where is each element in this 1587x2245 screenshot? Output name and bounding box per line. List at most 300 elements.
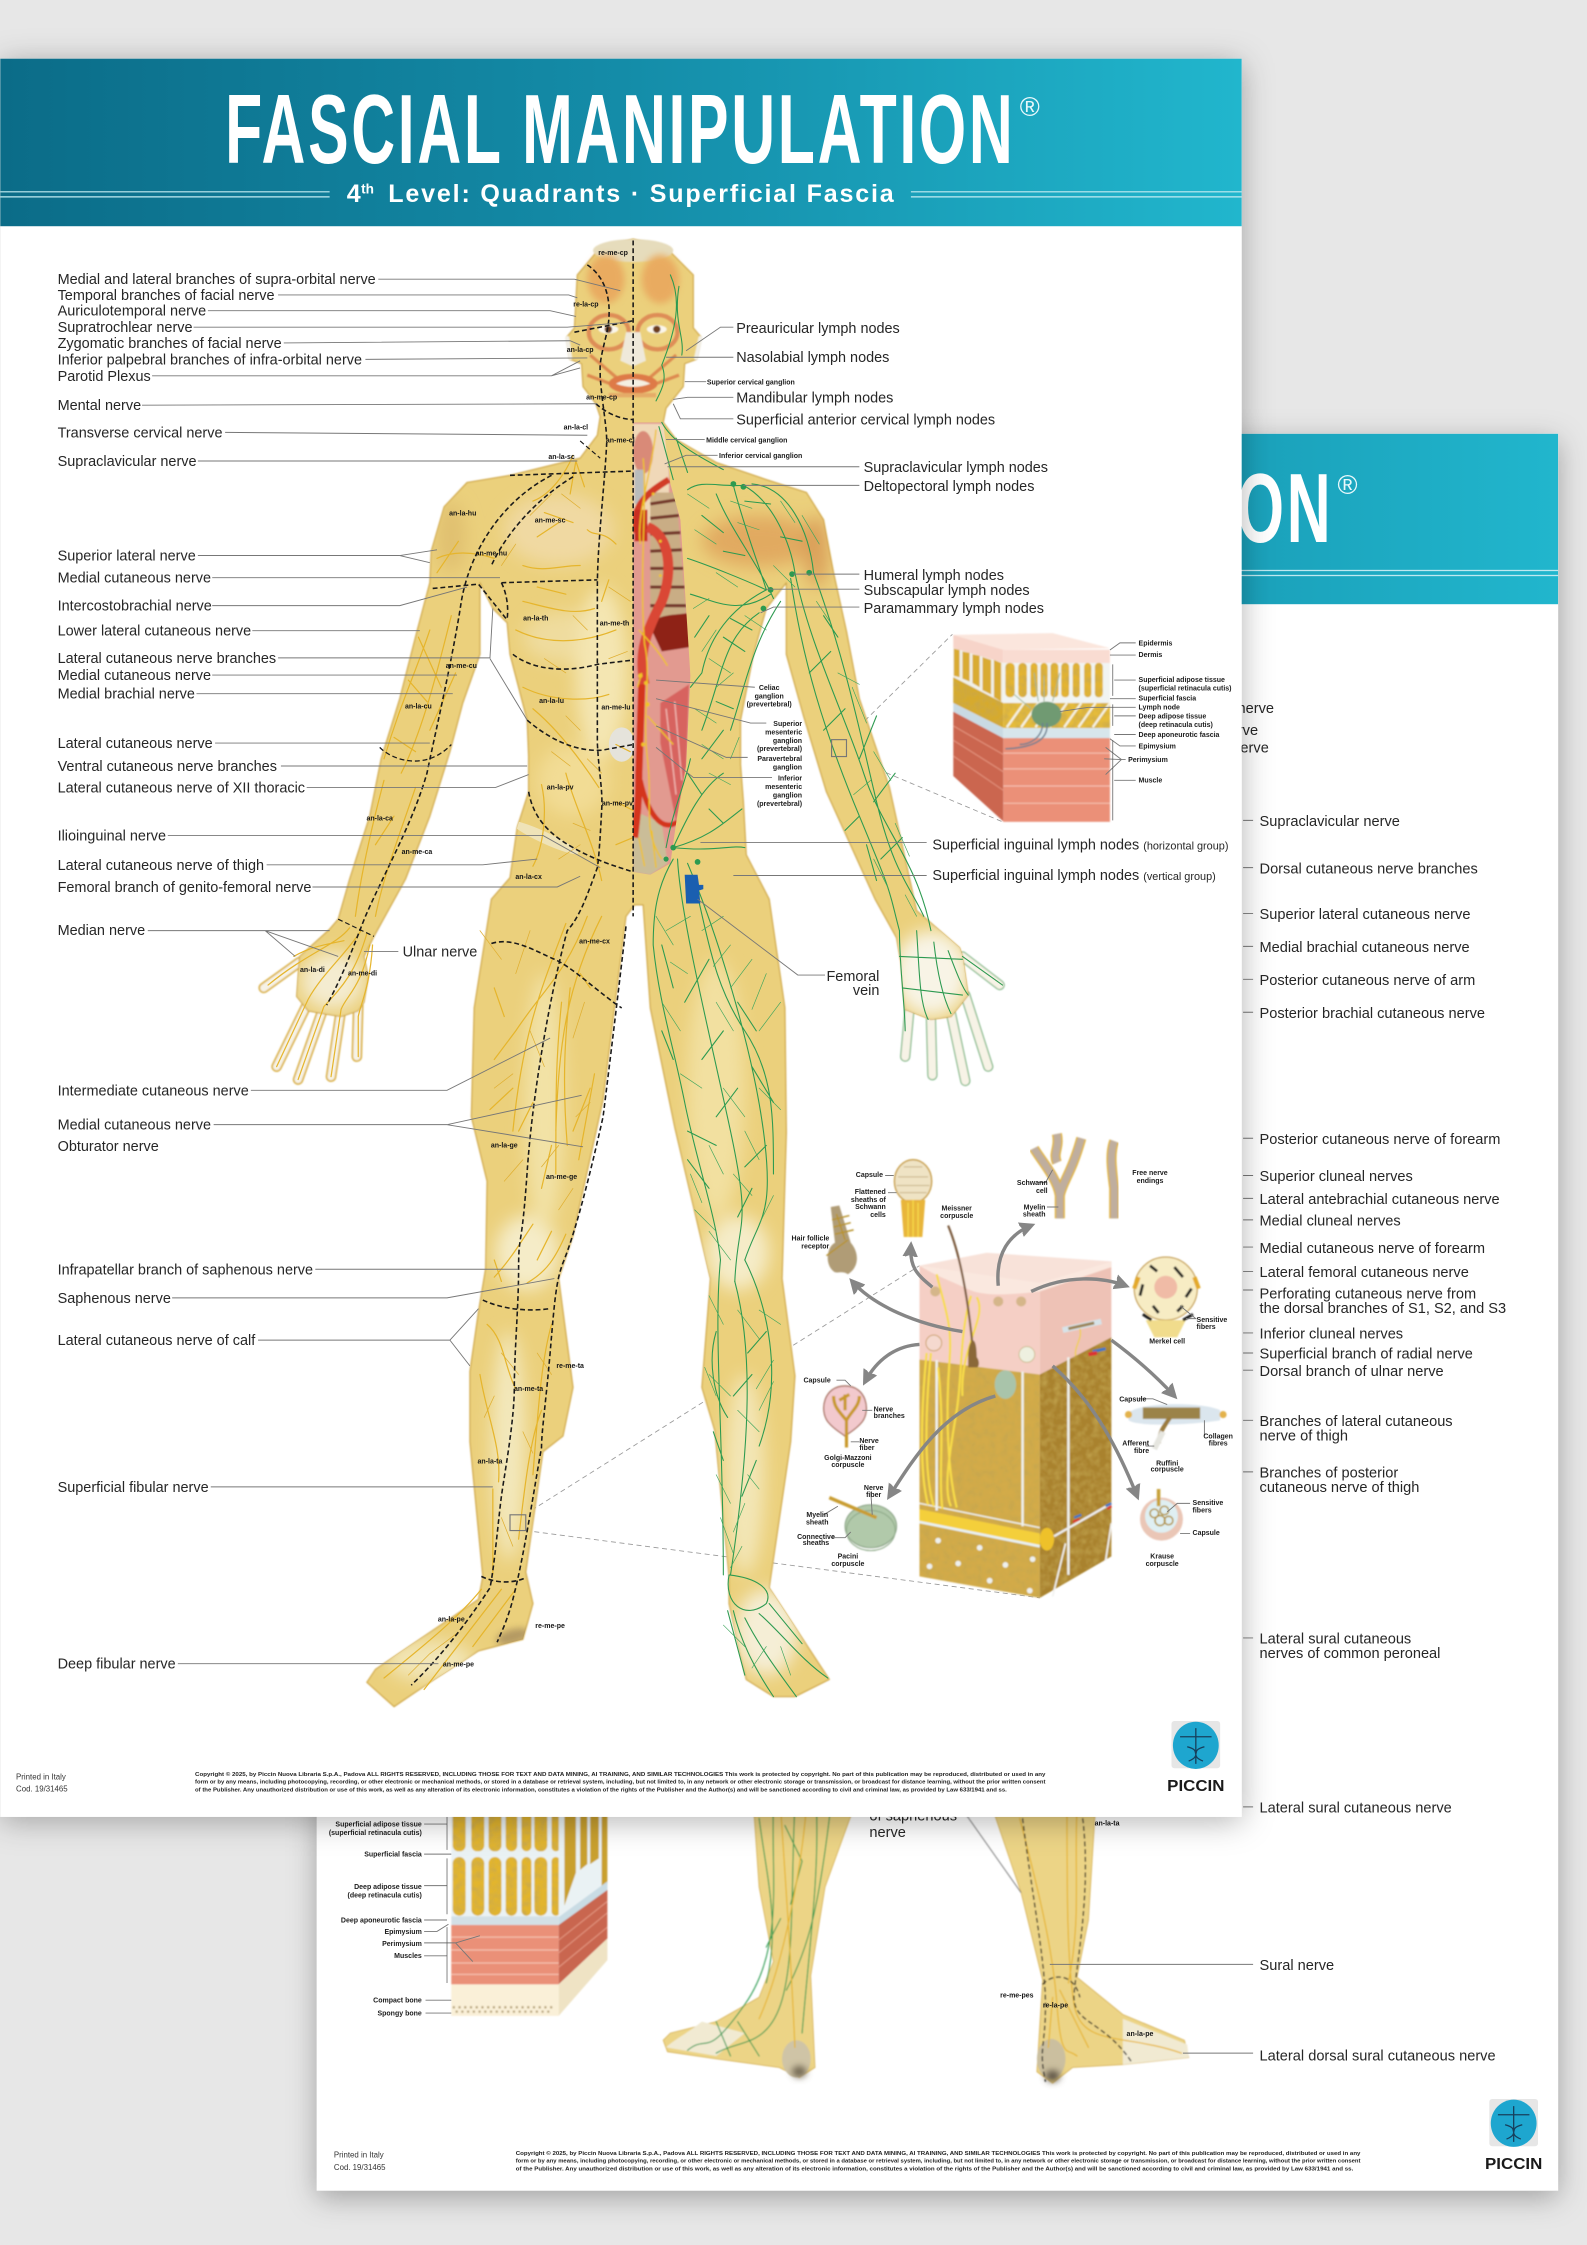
region codes: an-me-sc xyxy=(535,518,566,525)
quadrant dashed boundaries xyxy=(327,241,633,1685)
retinacula and fascia xyxy=(937,1357,1068,1575)
label: Superior lateral nerve xyxy=(58,549,437,565)
back poster leg codes: an-la-ta xyxy=(1095,1820,1120,1827)
receptor labels: Sensitive xyxy=(1193,1500,1223,1507)
label: Superficial fibular nerve: Superficial fibular nerve xyxy=(58,1480,209,1496)
adipose stripes xyxy=(1003,663,1110,703)
receptor labels: Hair follicle xyxy=(792,1236,829,1243)
label: Zygomatic branches of facial nerve xyxy=(58,336,580,352)
label: Intercostobrachial nerve: Intercostobrachial nerve xyxy=(58,599,212,615)
label: Lateral cutaneous nerve branches: Lateral cutaneous nerve branches xyxy=(58,651,276,667)
label: Medial and lateral branches of supra-orbital nerve: Medial and lateral branches of supra-orbital nerve xyxy=(58,272,376,288)
receptor labels: Sensitive xyxy=(1197,1317,1227,1324)
cutaneous nerves: yellow branches on left half xyxy=(268,455,633,1689)
back poster logo xyxy=(1485,2099,1542,2173)
back poster partly hidden labels: nerve xyxy=(1232,740,1269,756)
label: Lateral dorsal sural cutaneous nerve: Lateral dorsal sural cutaneous nerve xyxy=(1260,2048,1496,2064)
label: Lateral cutaneous nerve: Lateral cutaneous nerve xyxy=(58,736,213,752)
logo: PICCIN xyxy=(1167,1778,1224,1795)
back poster right nerve labels: Branches of lateral cutaneous xyxy=(1260,1414,1453,1430)
label: Celiac ganglion: ganglion xyxy=(755,694,784,701)
receptor labels: fiber xyxy=(866,1492,882,1499)
back poster right nerve labels: Inferior cluneal nerves xyxy=(1260,1327,1403,1343)
label: Ulnar nerve xyxy=(364,944,477,960)
back poster printing note xyxy=(334,2151,386,2172)
back poster header band: ® xyxy=(1338,469,1358,500)
receptor labels: Capsule xyxy=(1193,1530,1220,1537)
label: Supratrochlear nerve xyxy=(58,320,630,336)
receptor labels: branches xyxy=(874,1413,905,1420)
receptor labels: Flattened xyxy=(855,1189,886,1196)
label: Paravertebral ganglion: ganglion xyxy=(773,765,802,772)
back poster leg codes: re-me-pes xyxy=(1000,1992,1034,1999)
back poster right nerve labels: Posterior cutaneous nerve of arm xyxy=(1260,973,1475,989)
subtitle: 4 xyxy=(347,180,361,208)
label: Preauricular lymph nodes: Preauricular lymph nodes xyxy=(736,321,900,337)
label: Femoral vein: Femoral xyxy=(826,969,879,985)
receptor labels: corpuscle xyxy=(1151,1466,1184,1473)
receptor labels: sheaths of xyxy=(851,1197,887,1204)
label: Ventral cutaneous nerve branches: Ventral cutaneous nerve branches xyxy=(58,759,277,775)
back poster right nerve labels: Medial cluneal nerves xyxy=(1260,1214,1401,1230)
back poster right nerve labels: Lateral antebrachial cutaneous nerve xyxy=(1260,1192,1500,1208)
label: Saphenous nerve: Saphenous nerve xyxy=(58,1291,171,1307)
label: Ilioinguinal nerve xyxy=(58,828,600,868)
label: Femoral vein: vein xyxy=(853,983,879,999)
header band xyxy=(0,59,1242,226)
back poster cross-section labels: Superficial fascia xyxy=(364,1852,422,1859)
label: Inferior cervical ganglion: Inferior cervical ganglion xyxy=(719,453,802,460)
zoom markers on body xyxy=(510,740,846,1531)
receptor labels: fibre xyxy=(1134,1448,1149,1455)
label: Femoral vein xyxy=(698,899,879,999)
label: Paramammary lymph nodes xyxy=(761,601,1044,617)
body silhouette xyxy=(264,239,1000,1707)
back poster right nerve labels xyxy=(1243,814,1506,1817)
back poster right nerve labels: Lateral femoral cutaneous nerve xyxy=(1260,1265,1469,1281)
receptor labels: Capsule xyxy=(1119,1396,1147,1403)
receptor labels xyxy=(792,1170,1233,1568)
left hand fingers xyxy=(264,962,358,1080)
region codes: an-la-th xyxy=(523,616,548,623)
back poster right nerve labels: Superior lateral cutaneous nerve xyxy=(1260,907,1470,923)
receptor labels: Capsule xyxy=(803,1378,831,1385)
back poster leg codes: an-la-pe xyxy=(1127,2031,1154,2038)
back poster printing note: Cod. 19/31465 xyxy=(334,2163,386,2172)
label: Mental nerve: Mental nerve xyxy=(58,398,141,414)
embedded corpuscles xyxy=(926,1335,942,1351)
printing note: Cod. 19/31465 xyxy=(16,1785,68,1794)
inset: skin receptors block xyxy=(792,1134,1233,1598)
receptor: Merkel cell xyxy=(1134,1257,1199,1337)
label: Superior mesenteric ganglion: mesenteric xyxy=(765,729,802,736)
receptor labels: sheath xyxy=(806,1519,829,1526)
inset labels xyxy=(1060,641,1232,820)
body shading xyxy=(301,494,968,1681)
receptor labels: Krause xyxy=(1150,1553,1174,1560)
back poster right nerve labels: Superficial branch of radial nerve xyxy=(1260,1347,1473,1363)
deep adipose hatch xyxy=(1003,703,1110,728)
receptor labels: corpuscle xyxy=(940,1213,973,1220)
inset labels: (superficial retinacula cutis) xyxy=(1139,686,1232,693)
back poster cross-section labels: Deep adipose tissue xyxy=(354,1884,422,1891)
region codes: an-la-ta xyxy=(478,1458,503,1465)
region codes: an-me-lu xyxy=(601,704,631,711)
copyright: Copyright © 2025, by Piccin Nuova Libraria S.p.A., Padova ALL RIGHTS RESERVED, INCLUDING THOSE FOR TEXT AND DATA MINING, AI TRAINING, AND SIMILAR TECHNOLOGIES This work is protected by copyright. No part of this publication may be reproduced, distributed or used in any xyxy=(195,1771,1046,1778)
label: Celiac ganglion: (prevertebral) xyxy=(747,702,792,709)
receptor labels: Free nerve xyxy=(1132,1170,1168,1177)
label: Superficial inguinal lymph nodes (vertical): Superficial inguinal lymph nodes (vertical group) xyxy=(932,868,1216,884)
back poster cross-section labels: Muscles xyxy=(394,1953,422,1960)
receptor labels: Myelin xyxy=(1024,1204,1045,1211)
label: Celiac ganglion: Celiac xyxy=(759,685,780,692)
label: Paramammary lymph nodes: Paramammary lymph nodes xyxy=(864,601,1044,617)
region codes: an-la-pe xyxy=(438,1616,465,1623)
sensory nerves in block xyxy=(922,1274,979,1509)
receptor: Golgi-Mazzoni corpuscle xyxy=(824,1386,866,1448)
receptor labels: sheath xyxy=(1023,1212,1045,1219)
label: Superior mesenteric ganglion: ganglion xyxy=(773,738,802,745)
block top face xyxy=(953,633,1110,650)
inset: skin and lymph cross-section xyxy=(953,633,1232,822)
label: Superficial inguinal lymph nodes (horizontal): Superficial inguinal lymph nodes (horizontal group) xyxy=(932,838,1228,854)
receptor labels: Merkel cell xyxy=(1149,1339,1185,1346)
back poster cross-section labels: (superficial retinacula cutis) xyxy=(329,1830,422,1837)
label: Lateral cutaneous nerve branches xyxy=(58,608,527,720)
region codes: an-la-cp xyxy=(567,347,594,354)
label: Transverse cervical nerve: Transverse cervical nerve xyxy=(58,425,223,441)
back poster copyright xyxy=(516,2150,1361,2172)
label: Supraclavicular lymph nodes: Supraclavicular lymph nodes xyxy=(864,460,1048,476)
inset labels: Deep adipose tissue xyxy=(1139,713,1206,720)
panel: back poster xyxy=(317,434,1558,2191)
receptor labels: Capsule xyxy=(856,1172,883,1179)
inset labels: Epimysium xyxy=(1139,743,1176,750)
back poster right nerve labels: Perforating cutaneous nerve from xyxy=(1260,1287,1476,1303)
label: Superficial anterior cervical lymph nodes xyxy=(673,404,995,429)
fine green capillaries xyxy=(688,494,917,916)
receptor labels: corpuscle xyxy=(1146,1561,1179,1568)
back poster right nerve labels: cutaneous nerve of thigh xyxy=(1260,1480,1419,1496)
label: Celiac ganglion xyxy=(656,680,792,709)
receptor labels: Nerve xyxy=(859,1438,879,1445)
back poster leg codes xyxy=(1000,1820,1154,2038)
back poster header band xyxy=(317,434,1558,604)
inset labels: Superficial fascia xyxy=(1139,696,1196,703)
region codes: re-me-ta xyxy=(556,1363,584,1370)
lymph node xyxy=(1031,702,1062,727)
label: Lateral cutaneous nerve of calf: Lateral cutaneous nerve of calf xyxy=(58,1333,256,1349)
inset labels: Dermis xyxy=(1139,652,1162,659)
label: Middle cervical ganglion xyxy=(666,437,787,444)
inset labels: Perimysium xyxy=(1128,757,1168,764)
region codes: an-me-ge xyxy=(546,1174,577,1181)
hair xyxy=(948,1226,974,1360)
region codes: an-la-pv xyxy=(547,785,574,792)
label: Lateral cutaneous nerve of thigh xyxy=(58,858,537,874)
label: Ulnar nerve: Ulnar nerve xyxy=(403,944,477,960)
label: Paravertebral ganglion: Paravertebral xyxy=(757,756,802,763)
back poster right nerve labels: Lateral sural cutaneous nerve xyxy=(1260,1801,1452,1817)
figure: anatomical body xyxy=(264,239,1003,1707)
label: Humeral lymph nodes: Humeral lymph nodes xyxy=(864,568,1004,584)
receptor labels: Nerve xyxy=(864,1485,884,1492)
label: Zygomatic branches of facial nerve: Zygomatic branches of facial nerve xyxy=(58,336,282,352)
label: Lateral cutaneous nerve of XII thoracic xyxy=(58,775,529,796)
label: Lower lateral cutaneous nerve: Lower lateral cutaneous nerve xyxy=(58,624,251,640)
receptor: free nerve endings xyxy=(1034,1134,1114,1218)
label: Inferior cervical ganglion xyxy=(665,453,802,464)
receptor labels: Collagen xyxy=(1203,1433,1233,1440)
label: Subscapular lymph nodes: Subscapular lymph nodes xyxy=(864,583,1030,599)
printing note: Printed in Italy xyxy=(16,1773,66,1782)
back poster right nerve labels: Posterior brachial cutaneous nerve xyxy=(1260,1006,1485,1022)
receptor labels: Myelin xyxy=(806,1512,828,1519)
back poster partly hidden labels: nerve xyxy=(1222,723,1258,739)
block body xyxy=(919,1253,1111,1283)
label: Intercostobrachial nerve xyxy=(58,587,467,615)
back poster copyright: form or by any means, including photocopying, recording, or other electronic or mechanical methods, or stored in a database or retrieval system, including, but not limited to, in any network or other electronic storage or transmission, or broadcast for distance learning, without the prior written consent xyxy=(516,2159,1361,2165)
region codes: an-la-hu xyxy=(449,510,476,517)
label: Middle cervical ganglion: Middle cervical ganglion xyxy=(706,437,787,444)
receptor: Meissner corpuscle xyxy=(894,1160,932,1237)
back poster right nerve labels: Posterior cutaneous nerve of forearm xyxy=(1260,1132,1500,1148)
label: Inferior mesenteric ganglion: Inferior xyxy=(778,775,802,782)
inset labels: Epidermis xyxy=(1139,641,1173,648)
label: Sural nerve: Sural nerve xyxy=(1260,1958,1334,1974)
region codes: an-me-di xyxy=(348,971,377,978)
label: Mandibular lymph nodes: Mandibular lymph nodes xyxy=(736,390,893,406)
receptor: Pacini corpuscle xyxy=(829,1498,897,1551)
region codes: an-la-cx xyxy=(515,874,542,881)
muscle xyxy=(1003,738,1110,822)
label: Lateral cutaneous nerve of calf xyxy=(58,1309,479,1366)
inset labels: Deep aponeurotic fascia xyxy=(1139,732,1220,739)
region codes: an-me-cu xyxy=(446,663,477,670)
label: Medial and lateral branches of supra-orbital nerve xyxy=(58,272,620,291)
leg: lymphatic back view xyxy=(663,1804,855,2077)
kidney cut xyxy=(609,727,635,762)
copyright xyxy=(195,1771,1046,1793)
receptor labels: fiber xyxy=(859,1445,875,1452)
label: Inferior mesenteric ganglion: mesenteric xyxy=(765,784,802,791)
back poster cross-section labels: Superficial adipose tissue xyxy=(335,1821,422,1828)
inset labels: Superficial adipose tissue xyxy=(1139,677,1225,684)
back poster right nerve labels: Dorsal cutaneous nerve branches xyxy=(1260,861,1478,877)
back poster saphenous label: of saphenous xyxy=(869,1808,957,1824)
back poster cross-section labels: (deep retinacula cutis) xyxy=(348,1892,422,1899)
receptor labels: cells xyxy=(870,1212,886,1219)
label: Median nerve: Median nerve xyxy=(58,923,145,939)
region codes: an-me-ca xyxy=(402,849,432,856)
label: Superior mesenteric ganglion: (prevertebral) xyxy=(757,746,802,753)
face xyxy=(567,239,700,395)
label: Inferior mesenteric ganglion: (prevertebral) xyxy=(757,801,802,808)
ganglion labels xyxy=(656,380,802,808)
leg: nerve back view xyxy=(967,1804,1189,2083)
label: Superior mesenteric ganglion xyxy=(656,699,802,753)
receptor labels: Golgi-Mazzoni xyxy=(824,1455,872,1462)
back poster right nerve labels: Lateral sural cutaneous xyxy=(1260,1632,1411,1648)
label: Median nerve xyxy=(58,923,338,956)
back poster partly hidden labels: nerve xyxy=(1237,701,1274,717)
back poster right nerve labels: Dorsal branch of ulnar nerve xyxy=(1260,1364,1444,1380)
receptor labels: receptor xyxy=(801,1243,830,1250)
label: Obturator nerve: Obturator nerve xyxy=(58,1139,159,1155)
label: Lateral cutaneous nerve of thigh: Lateral cutaneous nerve of thigh xyxy=(58,858,264,874)
back poster cross-section labels: Spongy bone xyxy=(377,2010,422,2017)
dashed zoom guides xyxy=(524,634,1040,1598)
back poster right nerve labels: the dorsal branches of S1, S2, and S3 xyxy=(1260,1301,1506,1317)
back poster copyright: of the Publisher. Any unauthorized distribution or use of this work, as well as any alteration of its electronic information, constitutes a violation of the rights of the Publisher and the Author(s) and will be sanctioned according to civil and criminal law, as provided by Law 633/1941 and ss. xyxy=(516,2166,1354,2172)
region codes: re-la-cp xyxy=(573,301,599,308)
label: Nasolabial lymph nodes: Nasolabial lymph nodes xyxy=(736,350,889,366)
label: Intermediate cutaneous nerve xyxy=(58,1038,550,1099)
lymph vessels: green network on right half xyxy=(653,275,1003,1697)
region codes: an-la-cu xyxy=(405,704,432,711)
receptor labels: Meissner xyxy=(942,1206,972,1213)
back poster saphenous label xyxy=(869,1808,957,1841)
region codes: an-la-lu xyxy=(539,698,564,705)
registered mark: ® xyxy=(1020,91,1040,122)
back poster cross-section labels: Compact bone xyxy=(373,1998,422,2005)
back poster right nerve labels: Medial cutaneous nerve of forearm xyxy=(1260,1241,1485,1257)
arrows xyxy=(852,1226,1174,1496)
back poster tissue cross-section xyxy=(451,1798,607,2016)
exposed organs xyxy=(633,422,690,875)
receptor labels: corpuscle xyxy=(831,1561,865,1568)
region codes: an-me-cp xyxy=(586,394,617,401)
receptor labels: Pacini xyxy=(838,1553,858,1560)
receptor labels: Afferent xyxy=(1122,1441,1150,1448)
back poster cross-section labels xyxy=(329,1817,480,2017)
subtitle: th xyxy=(361,181,374,196)
label: Superior lateral nerve: Superior lateral nerve xyxy=(58,549,196,565)
region codes: an-me-pe xyxy=(443,1662,474,1669)
label: Supraclavicular nerve: Supraclavicular nerve xyxy=(58,454,197,470)
label: Preauricular lymph nodes xyxy=(686,321,900,351)
label: Deep fibular nerve: Deep fibular nerve xyxy=(58,1657,176,1673)
label: Medial cutaneous nerve (thigh): Medial cutaneous nerve xyxy=(58,1118,211,1134)
back poster right nerve labels: Medial brachial cutaneous nerve xyxy=(1260,940,1470,956)
label: Inferior mesenteric ganglion: ganglion xyxy=(773,792,802,799)
back poster right nerve labels: Supraclavicular nerve xyxy=(1260,814,1400,830)
inset labels: (deep retinacula cutis) xyxy=(1139,722,1213,729)
inset labels: Lymph node xyxy=(1139,705,1180,712)
region codes: an-me-cl xyxy=(606,437,635,444)
label: Medial brachial nerve: Medial brachial nerve xyxy=(58,687,195,703)
region codes: an-la-sc xyxy=(548,454,575,461)
label: Superior cervical ganglion: Superior cervical ganglion xyxy=(707,380,795,387)
region codes: an-me-cx xyxy=(579,939,610,946)
receptor: Ruffini corpuscle xyxy=(1125,1404,1227,1449)
label: Infrapatellar branch of saphenous nerve: Infrapatellar branch of saphenous nerve xyxy=(58,1262,313,1278)
back poster saphenous label: nerve xyxy=(869,1825,906,1841)
label: Saphenous nerve xyxy=(58,1279,554,1307)
left nerve labels xyxy=(58,272,630,1673)
region codes xyxy=(300,250,635,1669)
label: Femoral branch of genito-femoral nerve xyxy=(58,876,580,896)
receptor labels: fibres xyxy=(1209,1441,1228,1448)
right hand fingers xyxy=(905,956,1000,1081)
receptor labels: Nerve xyxy=(874,1406,893,1413)
label: Auriculotemporal nerve xyxy=(58,304,576,320)
region codes: an-me-hu xyxy=(476,551,507,558)
region codes: an-me-pv xyxy=(602,800,633,807)
panel: front poster xyxy=(0,59,1242,1817)
region codes: re-me-cp xyxy=(598,250,628,257)
receptor labels: cell xyxy=(1036,1188,1048,1195)
back poster logo: PICCIN xyxy=(1485,2156,1542,2173)
receptor labels: endings xyxy=(1137,1178,1164,1185)
receptor labels: Schwann xyxy=(1017,1180,1048,1187)
label: Medial cutaneous nerve (thigh) xyxy=(58,1095,583,1147)
subtitle: Level: Quadrants · Superficial Fascia xyxy=(388,180,895,208)
back poster cross-section labels: Deep aponeurotic fascia xyxy=(341,1917,422,1924)
label: Medial cutaneous nerve (forearm): Medial cutaneous nerve xyxy=(58,668,211,684)
region codes: an-la-ca xyxy=(366,815,393,822)
label: Paravertebral ganglion xyxy=(656,726,802,772)
back poster legs xyxy=(663,1804,1189,2083)
printing note xyxy=(16,1773,68,1794)
label: Lateral cutaneous nerve of XII thoracic: Lateral cutaneous nerve of XII thoracic xyxy=(58,780,305,796)
receptor labels: Connective xyxy=(797,1534,835,1541)
region codes: an-me-ta xyxy=(514,1386,543,1393)
receptor labels: Ruffini xyxy=(1156,1460,1178,1467)
title: FASCIAL MANIPULATION xyxy=(225,74,1015,184)
back poster right nerve labels: Branches of posterior xyxy=(1260,1466,1398,1482)
back poster right nerve labels: nerves of common peroneal xyxy=(1260,1646,1440,1662)
receptor labels: fibers xyxy=(1193,1508,1212,1515)
back poster cross-section labels: Epimysium xyxy=(384,1929,422,1936)
back poster partly hidden labels xyxy=(1222,701,1274,756)
back poster right nerve labels: nerve of thigh xyxy=(1260,1428,1348,1444)
label: Ilioinguinal nerve: Ilioinguinal nerve xyxy=(58,828,166,844)
back poster cross-section labels: Perimysium xyxy=(382,1941,422,1948)
label: Intermediate cutaneous nerve: Intermediate cutaneous nerve xyxy=(58,1083,249,1099)
receptor labels: Schwann xyxy=(855,1204,886,1211)
femoral vein xyxy=(685,875,703,903)
label: Auriculotemporal nerve: Auriculotemporal nerve xyxy=(58,304,206,320)
fine yellow twigs xyxy=(408,494,630,1675)
region codes: an-la-cl xyxy=(564,425,588,432)
label: Parotid Plexus: Parotid Plexus xyxy=(58,369,151,385)
lymph nodes xyxy=(663,481,812,865)
receptor: hair follicle xyxy=(826,1206,857,1274)
label: Inferior palpebral branches of infra-orbital nerve: Inferior palpebral branches of infra-orbital nerve xyxy=(58,352,362,368)
copyright: form or by any means, including photocopying, recording, or other electronic or mechanical methods, or stored in a database or retrieval system, including, but not limited to, in any network or other electronic storage or transmission, or broadcast for distance learning, without the prior written consent xyxy=(195,1780,1046,1786)
label: Medial cutaneous nerve: Medial cutaneous nerve xyxy=(58,571,211,587)
receptor labels: corpuscle xyxy=(831,1462,865,1469)
region codes: an-me-th xyxy=(600,621,629,628)
aponeurotic fascia xyxy=(1003,728,1110,738)
label: Inferior mesenteric ganglion xyxy=(656,747,802,808)
region codes: re-me-pe xyxy=(535,1623,565,1630)
label: Superior mesenteric ganglion: Superior xyxy=(773,721,802,728)
back poster copyright: Copyright © 2025, by Piccin Nuova Libraria S.p.A., Padova ALL RIGHTS RESERVED, INCLUDING THOSE FOR TEXT AND DATA MINING, AI TRAINING, AND SIMILAR TECHNOLOGIES This work is protected by copyright. No part of this publication may be reproduced, distributed or used in any xyxy=(516,2150,1361,2157)
region codes: an-la-ge xyxy=(491,1143,518,1150)
label: Supratrochlear nerve: Supratrochlear nerve xyxy=(58,320,193,336)
receptor labels: fibers xyxy=(1197,1324,1216,1331)
logo xyxy=(1167,1721,1224,1795)
label: Temporal branches of facial nerve: Temporal branches of facial nerve xyxy=(58,288,274,304)
label: Parotid Plexus xyxy=(58,361,580,385)
back poster printing note: Printed in Italy xyxy=(334,2151,384,2160)
inset labels: Muscle xyxy=(1139,778,1162,785)
back poster leg codes: re-la-pe xyxy=(1043,2002,1068,2009)
receptor labels: sheaths xyxy=(803,1540,829,1547)
back poster right nerve labels: Superior cluneal nerves xyxy=(1260,1169,1413,1185)
